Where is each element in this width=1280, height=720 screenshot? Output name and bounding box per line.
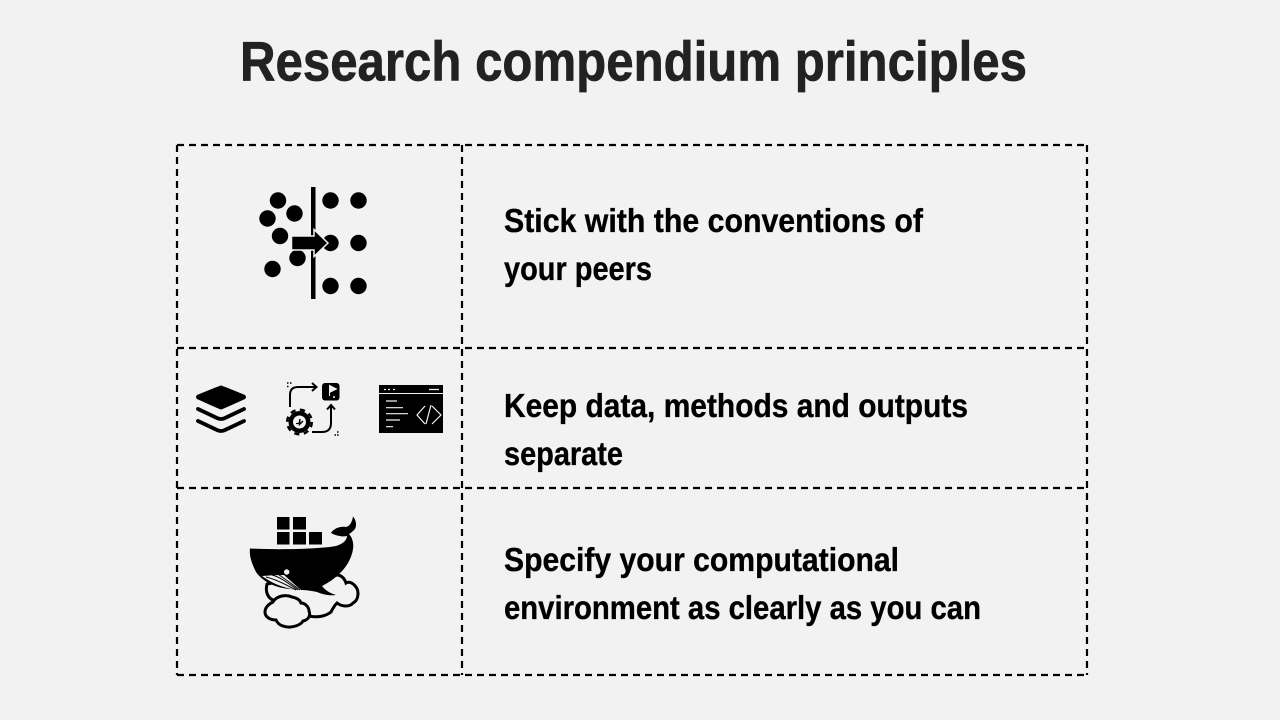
text: keep separate (504, 387, 968, 472)
text: specify environment (504, 541, 981, 626)
title: Research compendium principles (240, 30, 1027, 92)
table grid (177, 145, 1087, 675)
text: stick with conventions: your peers (504, 250, 652, 287)
icon: code window outputs (379, 385, 443, 433)
text: stick with conventions: Stick with the conventions of (504, 202, 924, 239)
icon: conventions dots crossing a line (259, 187, 367, 299)
icon: data layers (196, 386, 246, 431)
text: specify environment: Specify your computational (504, 541, 899, 578)
text: keep separate: Keep data, methods and outputs (504, 387, 968, 424)
text: keep separate: separate (504, 435, 623, 472)
text: stick with conventions (504, 202, 924, 287)
text: specify environment: environment as clearly as you can (504, 589, 981, 626)
icon: docker whale on cloud (250, 516, 358, 627)
icon: workflow methods (287, 383, 340, 435)
